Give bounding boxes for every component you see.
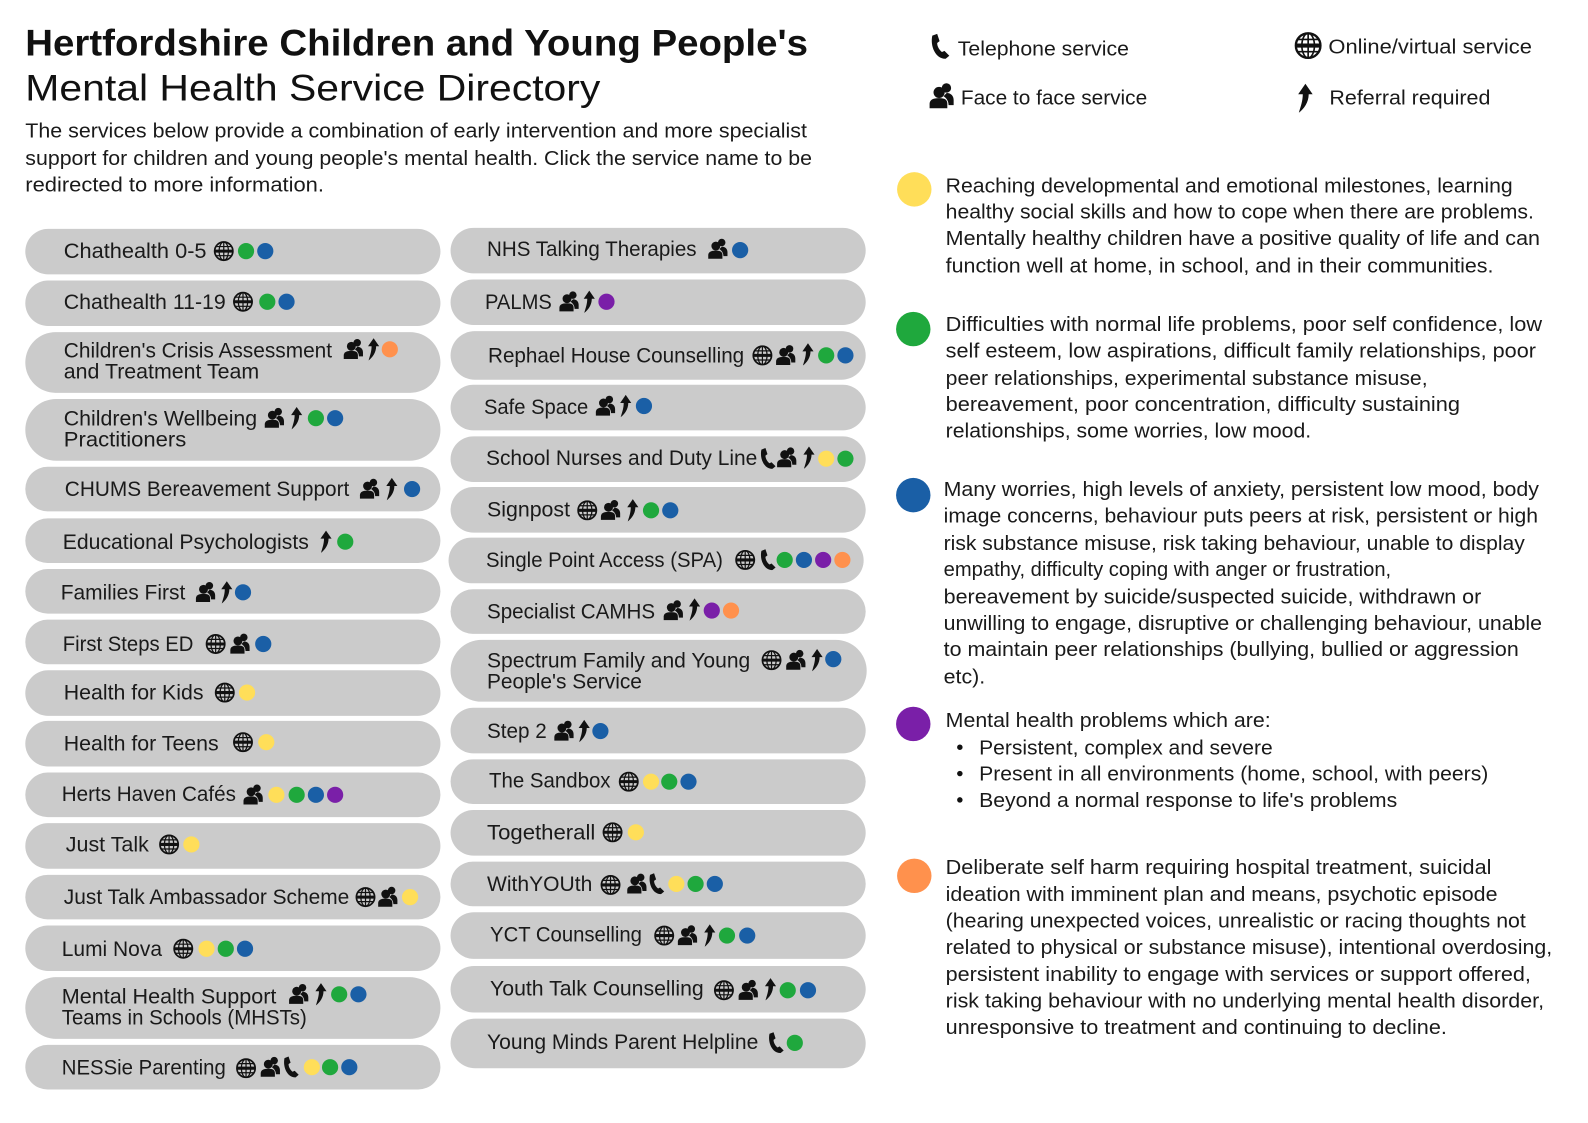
legend: online/virtual service: Online/virtual service <box>1328 36 1532 59</box>
key: orange level description: ideation with imminent plan and means, psychotic episode <box>946 883 1497 906</box>
service: First Steps ED: First Steps ED <box>63 632 193 656</box>
service: NHS Talking Therapies: NHS Talking Therapies <box>487 237 697 261</box>
key: purple level description: Beyond a normal response to life's problems <box>979 789 1397 812</box>
service: Lumi Nova: Lumi Nova <box>62 937 162 961</box>
service: Chathealth 0-5 <box>25 229 440 274</box>
service: Step 2: Step 2 <box>487 719 547 743</box>
service: Togetherall <box>451 810 866 856</box>
service: Just Talk Ambassador Scheme <box>25 875 440 919</box>
service: School Nurses and Duty Line <box>451 436 866 482</box>
title: Mental Health Service Directory <box>25 66 601 108</box>
service: WithYOUth <box>451 862 866 906</box>
service: Children's Wellbeing Practitioners: Children's Wellbeing <box>64 406 257 430</box>
key: orange level description: persistent inability to engage with services or support offered, <box>946 963 1531 986</box>
legend: referral required: Referral required <box>1329 86 1490 109</box>
service: Mental Health Support Teams in Schools (MHSTs): Teams in Schools (MHSTs) <box>62 1006 307 1030</box>
key: purple level description <box>896 707 1488 812</box>
service: Children's Crisis Assessment and Treatment Team: and Treatment Team <box>64 360 259 384</box>
intro text: support for children and young people's mental health. Click the service name to be <box>25 147 812 170</box>
service: Specialist CAMHS: Specialist CAMHS <box>487 600 655 624</box>
key: blue level description: bereavement by suicide/suspected suicide, withdrawn or <box>944 585 1481 608</box>
service: YCT Counselling <box>451 912 866 959</box>
key: green level description: bereavement, poor concentration, difficulty sustaining <box>946 393 1460 416</box>
key: blue level description <box>896 478 1542 688</box>
service: Just Talk Ambassador Scheme: Just Talk Ambassador Scheme <box>64 885 349 909</box>
service: Specialist CAMHS <box>451 589 866 634</box>
service: Health for Kids <box>25 670 440 716</box>
service: Spectrum Family and Young People's Service: People's Service <box>487 670 642 694</box>
service: PALMS <box>451 279 866 325</box>
service: Young Minds Parent Helpline <box>451 1019 866 1068</box>
service: Families First <box>25 569 440 614</box>
key: yellow level description: Reaching developmental and emotional milestones, learning <box>946 174 1513 197</box>
service: Lumi Nova <box>25 925 440 971</box>
service: The Sandbox <box>451 759 866 804</box>
key: blue level description: risk substance misuse, risk taking behaviour, unable to display <box>944 532 1525 555</box>
key: orange level description: Deliberate self harm requiring hospital treatment, suicidal <box>946 856 1491 879</box>
service: NHS Talking Therapies <box>451 228 866 273</box>
key: yellow level description: healthy social skills and how to cope when there are problems. <box>946 201 1534 224</box>
service: Children's Wellbeing Practitioners <box>25 399 440 461</box>
key: orange level description: related to physical or substance misuse), intentional overdosing, <box>946 936 1552 959</box>
service: Signpost <box>451 487 866 533</box>
service: Just Talk <box>25 823 440 869</box>
title: Hertfordshire Children and Young People's <box>25 22 808 64</box>
service: Single Point Access (SPA): Single Point Access (SPA) <box>486 548 723 572</box>
key: purple level description: Mental health problems which are: <box>946 709 1271 732</box>
intro text: redirected to more information. <box>25 173 324 196</box>
service: Togetherall: Togetherall <box>487 820 595 844</box>
key: blue level description: etc). <box>944 665 985 688</box>
key: orange level description: (hearing unexpected voices, unrealistic or racing thoughts not <box>946 909 1526 932</box>
key: blue level description: empathy, difficulty coping with anger or frustration, <box>944 558 1391 581</box>
key: purple level description: Persistent, complex and severe <box>979 736 1273 759</box>
legend: telephone service: Telephone service <box>958 38 1129 61</box>
service: Mental Health Support Teams in Schools (MHSTs) <box>25 977 440 1039</box>
key: green level description: self esteem, low aspirations, difficult family relationships, poor <box>946 339 1536 362</box>
service: Step 2 <box>451 708 866 753</box>
intro text: The services below provide a combination of early intervention and more specialist <box>25 120 807 143</box>
key: green level description <box>896 312 1543 442</box>
service: Signpost: Signpost <box>487 497 570 521</box>
service: Rephael House Counselling <box>451 331 866 380</box>
service: Spectrum Family and Young People's Service: Spectrum Family and Young <box>487 648 750 672</box>
service: Youth Talk Counselling <box>451 966 866 1013</box>
title <box>25 22 808 108</box>
service: NESSie Parenting <box>25 1045 440 1089</box>
service: Just Talk: Just Talk <box>66 833 149 857</box>
service: Families First: Families First <box>61 580 185 604</box>
service: Herts Haven Cafés <box>25 773 440 817</box>
key: purple level description: Present in all environments (home, school, with peers) <box>979 763 1488 786</box>
key: yellow level description: function well at home, in school, and in their communities. <box>946 254 1493 277</box>
service: NESSie Parenting: NESSie Parenting <box>62 1055 226 1079</box>
service: Children's Crisis Assessment and Treatment Team <box>25 332 440 393</box>
legend: face to face service: Face to face service <box>961 86 1147 109</box>
key: yellow level description <box>897 172 1540 277</box>
service: Safe Space: Safe Space <box>484 395 588 419</box>
legend: referral required <box>1298 84 1490 113</box>
service: Health for Kids: Health for Kids <box>64 681 204 705</box>
service: Single Point Access (SPA) <box>449 538 864 583</box>
service: Mental Health Support Teams in Schools (MHSTs): Mental Health Support <box>62 984 276 1008</box>
panel: left column of services <box>25 229 440 1089</box>
service: CHUMS Bereavement Support <box>25 467 440 511</box>
service: Children's Wellbeing Practitioners: Practitioners <box>64 428 186 452</box>
service: WithYOUth: WithYOUth <box>487 872 592 896</box>
key: orange level description <box>897 856 1552 1039</box>
key: green level description: relationships, some worries, low mood. <box>946 419 1311 442</box>
service: Rephael House Counselling: Rephael House Counselling <box>488 343 744 367</box>
key: blue level description: to maintain peer relationships (bullying, bullied or aggression <box>944 638 1519 661</box>
key: orange level description: unresponsive to treatment and continuing to decline. <box>946 1016 1447 1039</box>
service: Young Minds Parent Helpline: Young Minds Parent Helpline <box>487 1030 758 1054</box>
key: blue level description: image concerns, behaviour puts peers at risk, persistent or high <box>944 504 1538 527</box>
service: Herts Haven Cafés: Herts Haven Cafés <box>62 782 236 806</box>
service: Chathealth 11-19: Chathealth 11-19 <box>64 290 226 314</box>
service: Safe Space <box>451 385 866 430</box>
legend: icon key <box>930 33 1532 113</box>
service: Health for Teens: Health for Teens <box>64 731 219 755</box>
service: School Nurses and Duty Line: School Nurses and Duty Line <box>486 446 757 470</box>
service: Educational Psychologists: Educational Psychologists <box>63 530 309 554</box>
service: First Steps ED <box>25 620 440 664</box>
service: Spectrum Family and Young People's Service <box>451 640 867 702</box>
panel: right column of services <box>449 228 867 1068</box>
service: Children's Crisis Assessment and Treatment Team: Children's Crisis Assessment <box>64 338 332 362</box>
service: The Sandbox: The Sandbox <box>489 769 611 793</box>
key: orange level description: risk taking behaviour with no underlying mental health disorder, <box>946 989 1544 1012</box>
service: Chathealth 11-19 <box>25 280 440 326</box>
key: green level description: peer relationships, experimental substance misuse, <box>946 367 1428 390</box>
key: blue level description: Many worries, high levels of anxiety, persistent low mood, body <box>944 478 1540 501</box>
key: green level description: Difficulties with normal life problems, poor self confidence, low <box>946 313 1543 336</box>
service: YCT Counselling: YCT Counselling <box>490 923 642 947</box>
service: Health for Teens <box>25 721 440 766</box>
service: PALMS: PALMS <box>485 290 552 314</box>
intro text <box>25 120 812 196</box>
service: Chathealth 0-5: Chathealth 0-5 <box>64 239 207 263</box>
service: Educational Psychologists <box>25 518 440 563</box>
key: yellow level description: Mentally healthy children have a positive quality of life and can <box>946 227 1540 250</box>
key: blue level description: unwilling to engage, disruptive or challenging behaviour, unable <box>944 612 1542 635</box>
service: Youth Talk Counselling: Youth Talk Counselling <box>490 976 704 1000</box>
service: CHUMS Bereavement Support: CHUMS Bereavement Support <box>65 477 349 501</box>
